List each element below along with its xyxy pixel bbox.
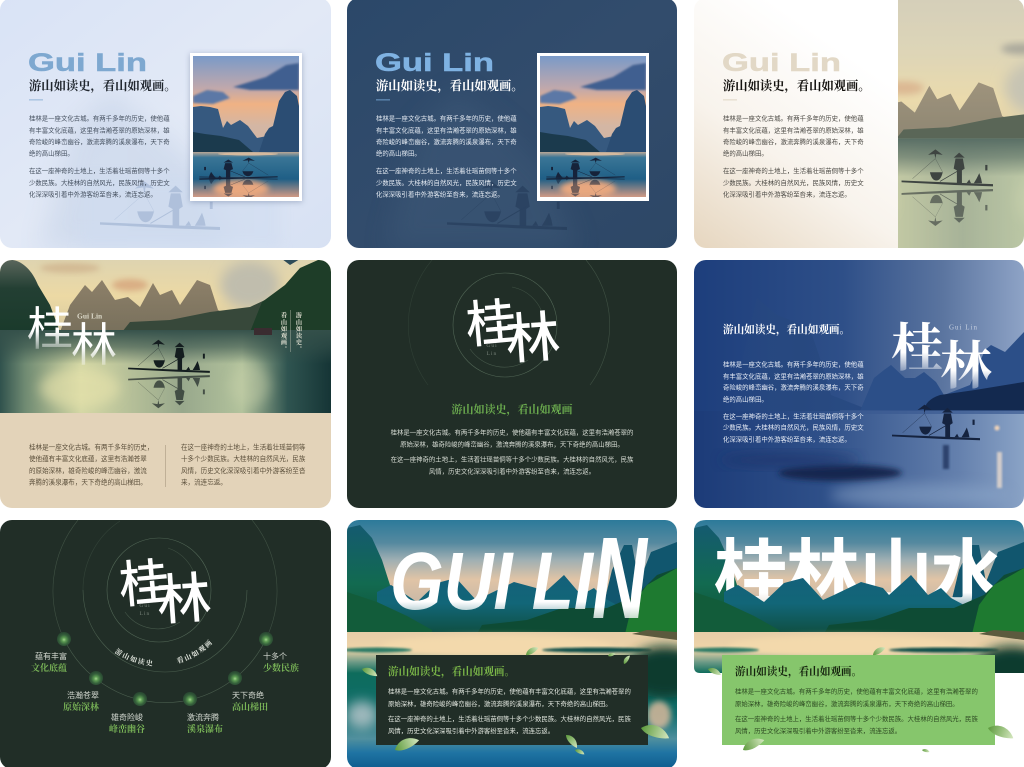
body text right column: 风情，历史文化深深吸引着中外游客纷至沓: [181, 466, 306, 475]
heading: 游山如读史，看山如观画。: [735, 665, 862, 678]
node label: forest: 浩瀚苍翠: [67, 690, 99, 700]
water: [694, 411, 1024, 510]
body text: 桂林是一座文化古城。有两千多年的历史，使他蕴: [376, 114, 517, 122]
body text: [735, 686, 978, 735]
title 桂林: 林: [940, 339, 992, 396]
node label: terraces: 天下奇绝: [232, 690, 264, 700]
title 桂林: 林: [504, 307, 562, 371]
heading: 游山如读史，看山如观画。: [376, 78, 524, 93]
title 桂林: 桂: [464, 294, 519, 354]
brush title GUI LIN: [390, 513, 648, 643]
large title 桂林山水: 桂: [714, 533, 788, 616]
body text: 桂林是一座文化古城。有两千多年的历史，使他蕴有丰富文化底蕴，这里有浩瀚苍翠的: [388, 686, 631, 696]
top photo: [0, 260, 331, 413]
body text: 风情，历史文化深深吸引着中外游客纷至沓来，流连忘返。: [735, 726, 901, 735]
leaves: [707, 645, 1016, 753]
body text: 在这一座神奇的土地上，生活着壮瑶苗侗等十多个: [723, 412, 864, 420]
subtitle Gui Lin: Gui: [139, 603, 151, 609]
node label: ethnic groups: 少数民族: [263, 662, 299, 673]
title 桂林: [28, 306, 116, 365]
body text: 桂林是一座文化古城。有两千多年的历史，使他蕴: [29, 114, 170, 122]
text panel: [376, 655, 648, 745]
panel: card 7 dark green radial diagram: [0, 520, 331, 767]
body text: 有丰富文化底蕴，这里有浩瀚苍翠的原始深林，雄: [723, 126, 864, 134]
side photo: [898, 0, 1024, 248]
curved slogan left: 游山如读史: [114, 648, 152, 666]
node label: culture: 文化底蕴: [31, 662, 67, 673]
body text: 在这一座神奇的土地上，生活着壮瑶苗侗等十多个少数民族。大桂林的自然风光，民族: [735, 714, 978, 723]
vertical slogan: 看山如观画。: [280, 311, 287, 353]
body text: [376, 114, 517, 198]
brand title: Gui Lin: [28, 49, 147, 77]
node label: culture: [31, 651, 67, 673]
title 桂林: 桂: [117, 554, 172, 614]
large title 桂林山水: [714, 533, 1004, 616]
title 桂林: 桂: [891, 321, 943, 378]
leaves: [361, 645, 672, 756]
node label: waterfall: 溪泉瀑布: [187, 723, 223, 734]
body text: 化深深吸引着中外游客纷至沓来，流连忘返。: [723, 190, 851, 198]
brand title: Gui Lin: [722, 49, 841, 77]
panel: card 6 blue scene: [694, 260, 1024, 510]
body text: 在这一座神奇的土地上，生活着壮瑶苗侗等十多个: [29, 166, 170, 175]
node label: forest: 原始深林: [63, 701, 99, 712]
body text: 化深深吸引着中外游客纷至沓来，流连忘返。: [376, 190, 504, 198]
node label: culture: 蕴有丰富: [35, 651, 67, 661]
title 桂林: 桂: [27, 303, 73, 355]
panel: card 4 photo top beige bottom: [0, 260, 331, 508]
panel: card 8 landscape with brush title: [342, 513, 705, 767]
body text: 在这一座神奇的土地上，生活着壮瑶苗侗等十多个: [723, 166, 864, 175]
title 桂林: [892, 322, 992, 389]
body text right column: 十多个少数民族。大桂林的自然风光，民族: [181, 454, 306, 463]
body text right column: [181, 442, 306, 486]
body text: 绝的高山梯田。: [376, 148, 421, 158]
text panel: [722, 655, 995, 745]
icon: fisher on raft: [892, 405, 980, 440]
subtitle Gui Lin: Gui Lin: [949, 324, 978, 332]
body text left column: 使他蕴有丰富文化底蕴，这里有浩瀚苍翠: [29, 454, 147, 463]
body text: 少数民族。大桂林的自然风光，民族风情，历史文: [376, 178, 517, 187]
node label: ethnic groups: 十多个: [263, 651, 287, 661]
node label: peaks: [109, 712, 145, 734]
body text: [723, 360, 864, 444]
title 桂林: [467, 298, 560, 362]
node label: peaks: 峰峦幽谷: [109, 723, 145, 734]
body text: 桂林是一座文化古城。有两千多年的历史，使他蕴: [723, 360, 864, 368]
icon: ghost fisher: [100, 181, 220, 230]
right mountains: [860, 332, 1024, 411]
body text: 在这一座神奇的土地上，生活着壮瑶苗侗等十多个少数民族。大桂林的自然风光，民族: [391, 454, 634, 464]
panel: card 1 light blue with framed photo: [0, 0, 331, 248]
body text right column: 来，流连忘返。: [181, 478, 227, 486]
subtitle Gui Lin: [486, 344, 496, 355]
heading: 游山如读史，看山如观画。: [723, 78, 871, 93]
body text: 绝的高山梯田。: [723, 394, 768, 404]
body text: 在这一座神奇的土地上，生活着壮瑶苗侗等十多个少数民族。大桂林的自然风光，民族: [388, 714, 631, 723]
brush title GUI LIN: GUI LI: [390, 536, 595, 627]
vertical slogan: 游山如读史。: [294, 311, 302, 353]
subtitle Gui Lin: Gui Lin: [77, 312, 103, 320]
large title 桂林山水: 山: [859, 533, 933, 616]
panel: card 9 landscape with large title: [689, 520, 1024, 767]
subtitle Gui Lin: [139, 603, 151, 617]
framed photo: [537, 53, 649, 201]
body text: 有丰富文化底蕴，这里有浩瀚苍翠的原始深林，雄: [376, 126, 517, 134]
body text: 化深深吸引着中外游客纷至沓来，流连忘返。: [723, 434, 851, 444]
heading: 游山如读史，看山如观画。: [723, 323, 850, 336]
body text right column: 在这一座神奇的土地上，生活着壮瑶苗侗等: [181, 442, 306, 452]
heading: 游山如读史，看山如观画。: [29, 78, 177, 93]
body text: 奇险峻的峰峦幽谷，激流奔腾的溪泉瀑布，天下奇: [376, 137, 517, 146]
body text: 有丰富文化底蕴，这里有浩瀚苍翠的原始深林，雄: [29, 126, 170, 134]
title 桂林: [120, 558, 211, 624]
panel: card 2 dark blue with framed photo: [347, 0, 677, 248]
panel: card 5 dark green centered title: [347, 260, 677, 508]
framed photo: [190, 53, 302, 201]
subtitle Gui Lin: Lin: [140, 611, 150, 617]
body text: 原始深林，雄奇险峻的峰峦幽谷，激流奔腾的溪泉瀑布，天下奇绝的高山梯田。: [388, 699, 612, 708]
left mountains: [848, 402, 862, 410]
body text: 风情，历史文化深深吸引着中外游客纷至沓来，流连忘返。: [388, 726, 554, 735]
node label: terraces: 高山梯田: [232, 701, 268, 712]
body text: 原始深林，雄奇险峻的峰峦幽谷，激流奔腾的溪泉瀑布，天下奇绝的高山梯田。: [735, 699, 959, 708]
body text: 少数民族。大桂林的自然风光，民族风情，历史文: [723, 422, 864, 432]
body text: 风情，历史文化深深吸引着中外游客纷至沓来，流连忘返。: [429, 466, 595, 476]
brush title GUI LIN: N: [592, 513, 648, 643]
body text left column: [29, 442, 153, 486]
icon: ghost fisher: [447, 181, 567, 230]
body text: [388, 686, 631, 735]
body text: 绝的高山梯田。: [723, 148, 768, 158]
body text left column: 桂林是一座文化古城。有两千多年的历史，: [29, 442, 153, 452]
subtitle Gui Lin: Lin: [487, 351, 497, 357]
body text: 化深深吸引着中外游客纷至沓来，流连忘返。: [29, 190, 157, 198]
vertical slogan: [281, 312, 302, 348]
body text: 奇险峻的峰峦幽谷，激流奔腾的溪泉瀑布，天下奇: [723, 137, 864, 146]
node label: terraces: [232, 690, 268, 712]
body text: [723, 114, 864, 198]
large title 桂林山水: 水: [930, 533, 1004, 616]
large title 桂林山水: 林: [786, 533, 860, 616]
node label: waterfall: [187, 712, 223, 734]
heading: 游山如读史，看山如观画: [452, 402, 572, 416]
title 桂林: 林: [71, 319, 117, 371]
body text: 奇险峻的峰峦幽谷，激流奔腾的溪泉瀑布，天下奇: [29, 137, 170, 146]
body text: 原始深林，雄奇险峻的峰峦幽谷，激流奔腾的溪泉瀑布，天下奇绝的高山梯田。: [400, 440, 624, 448]
node label: waterfall: 激流奔腾: [187, 712, 219, 722]
body text: 在这一座神奇的土地上，生活着壮瑶苗侗等十多个: [376, 166, 517, 175]
body text: 奇险峻的峰峦幽谷，激流奔腾的溪泉瀑布，天下奇: [723, 382, 864, 392]
brand title: Gui Lin: [375, 49, 494, 77]
timeline nodes: [57, 632, 273, 706]
body text: 少数民族。大桂林的自然风光，民族风情，历史文: [29, 178, 170, 187]
node label: forest: [63, 690, 99, 712]
node label: peaks: 雄奇险峻: [111, 712, 143, 722]
body text left column: 的原始深林，雄奇险峻的峰峦幽谷，激流: [29, 466, 147, 475]
title 桂林: 林: [155, 568, 213, 632]
body text: 桂林是一座文化古城。有两千多年的历史，使他蕴有丰富文化底蕴，这里有浩瀚苍翠的: [735, 686, 978, 696]
body text: 桂林是一座文化古城。有两千多年的历史，使他蕴: [723, 114, 864, 122]
curved slogan right: 看山如观画: [176, 640, 212, 664]
body text left column: 奔腾的溪泉瀑布，天下奇绝的高山梯田。: [29, 478, 147, 486]
heading: 游山如读史，看山如观画。: [388, 665, 515, 678]
body text: [391, 428, 634, 476]
body text: 少数民族。大桂林的自然风光，民族风情，历史文: [723, 178, 864, 187]
node label: ethnic groups: [263, 651, 299, 673]
body text: 有丰富文化底蕴，这里有浩瀚苍翠的原始深林，雄: [723, 372, 864, 380]
body text: 桂林是一座文化古城。有两千多年的历史，使他蕴有丰富文化底蕴，这里有浩瀚苍翠的: [391, 428, 633, 436]
subtitle Gui Lin: Gui: [486, 343, 498, 349]
panel: card 3 white and beige with side photo: [694, 0, 1024, 262]
body text: [29, 114, 170, 198]
body text: 绝的高山梯田。: [29, 148, 74, 158]
